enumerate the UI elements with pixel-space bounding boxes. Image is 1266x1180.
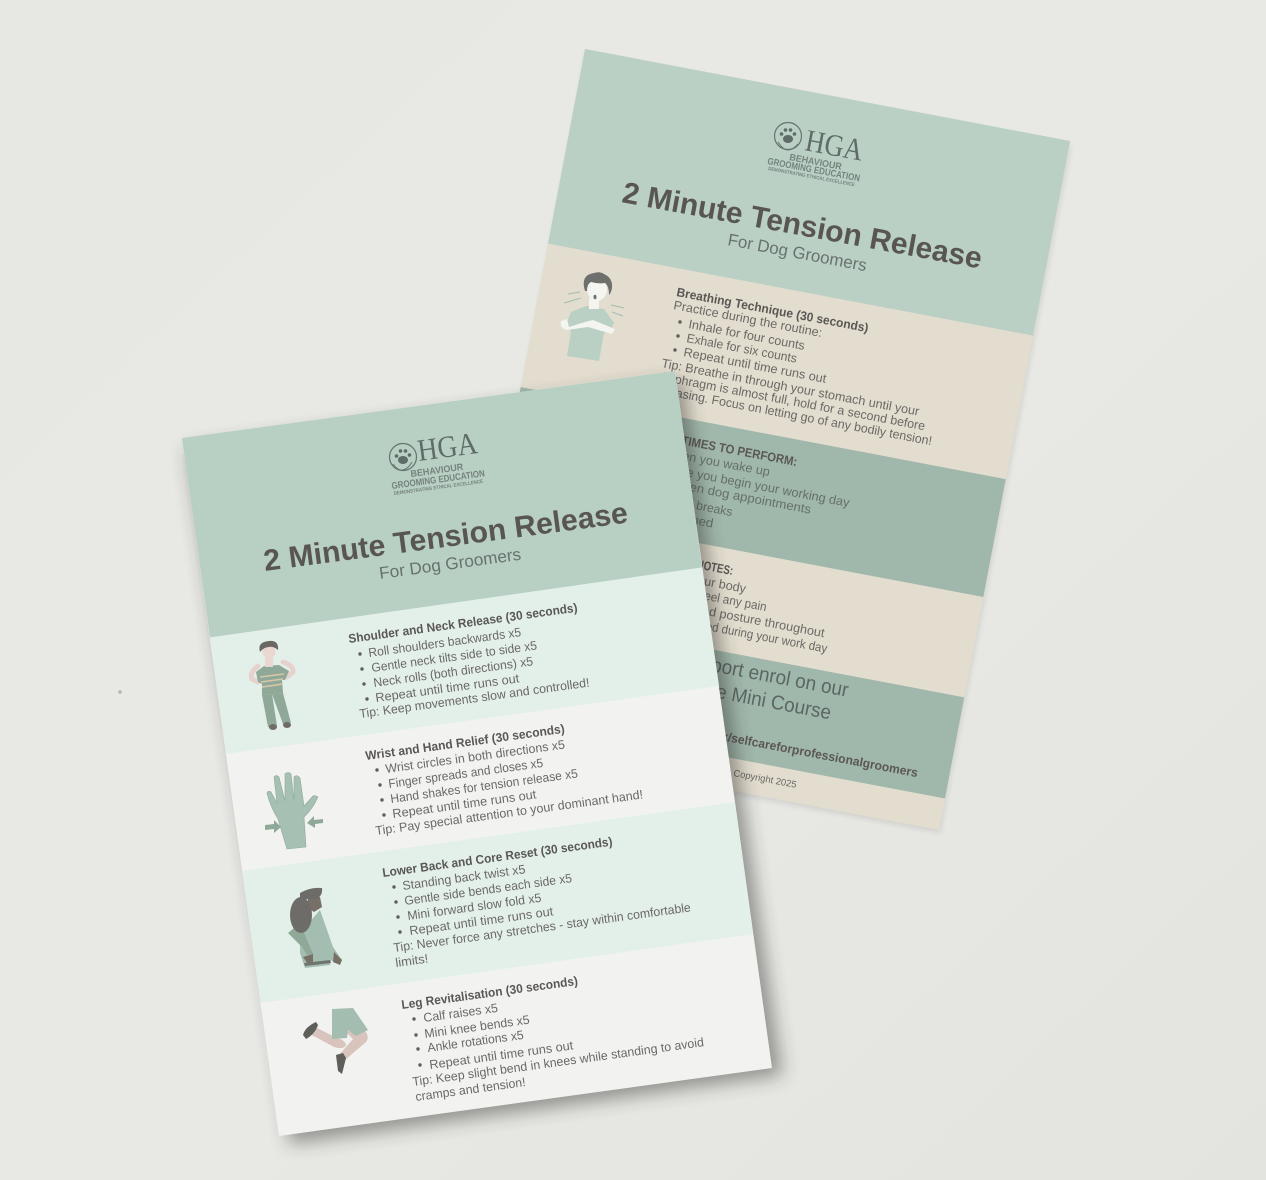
subtitle (back): For Dog Groomers	[726, 230, 868, 275]
text block: important notes: IMPORTANT NOTES:	[636, 546, 734, 578]
text block: best times to perform: BEST TIMES TO PERFORM:	[647, 427, 798, 469]
text block: breathing technique: Breathing Technique (30 seconds)	[675, 285, 870, 335]
text block: wrist and hand relief: Wrist and Hand Relief (30 seconds)	[365, 722, 566, 763]
icon: HGA logo (back): HGA	[803, 122, 867, 168]
text block: leg revitalisation: Ankle rotations x5	[427, 1028, 525, 1055]
text block: wrist and hand relief: Hand shakes for tension release x5	[390, 766, 579, 806]
text block: best times to perform: Between dog appointments	[652, 473, 812, 517]
back card colour bands	[454, 49, 1070, 830]
icon: woman holding lower back	[288, 888, 342, 968]
panel: front card	[182, 371, 772, 1136]
icon: breathing person	[561, 272, 624, 361]
text block: wrist and hand relief: Finger spreads and closes x5	[388, 756, 544, 791]
icon: hand with arrows	[265, 772, 323, 849]
subtitle (front): For Dog Groomers	[378, 545, 522, 583]
text block: leg revitalisation: Tip: Keep slight bend in knees while standing to avoid	[412, 1035, 705, 1089]
text block: leg revitalisation: Mini knee bends x5	[424, 1013, 530, 1041]
text block: best times to perform: Before you begin your working day	[655, 460, 851, 510]
icon: person stretching shoulders	[251, 641, 293, 730]
call to action: hga.uk/selfcareforprofessionalgroomers	[688, 723, 919, 780]
text block: lower back and core reset: Tip: Never force any stretches - stay within comfortable	[393, 900, 692, 955]
text block: shoulder and neck release	[348, 601, 590, 721]
text block: shoulder and neck release: Repeat until time runs out	[375, 671, 521, 705]
text block: lower back and core reset: Gentle side bends each side x5	[404, 871, 573, 908]
icon: HGA logo (front)	[390, 425, 486, 497]
text block: important notes: Stop if you feel any pain	[642, 577, 768, 614]
text block: breathing technique: diaphragm is almost full, hold for a second before	[657, 369, 926, 433]
icon: HGA logo (front): GROOMING EDUCATION	[391, 468, 486, 492]
icon: HGA logo (back): BEHAVIOUR	[788, 152, 843, 173]
text block: shoulder and neck release: Tip: Keep movements slow and controlled!	[359, 676, 590, 721]
text block: best times to perform: When you wake up	[662, 445, 771, 479]
icon: HGA logo (back)	[766, 122, 867, 188]
text block: lower back and core reset: Lower Back and Core Reset (30 seconds)	[382, 835, 613, 880]
text block: best times to perform: During breaks	[656, 491, 734, 519]
text block: lower back and core reset: limits!	[395, 952, 429, 970]
text block: shoulder and neck release: Gentle neck tilts side to side x5	[371, 638, 538, 675]
text block: leg revitalisation: cramps and tension!	[415, 1075, 526, 1104]
call to action	[599, 633, 919, 780]
icon: HGA logo (front): HGA	[415, 425, 480, 468]
icon: HGA logo (back): GROOMING EDUCATION	[766, 156, 861, 184]
text block: lower back and core reset	[382, 835, 692, 970]
text block: breathing technique: Practice during the routine:	[672, 298, 823, 340]
text block: lower back and core reset: Repeat until time runs out	[409, 904, 555, 938]
title (front): 2 Minute Tension Release	[262, 497, 630, 578]
icon: running legs	[303, 1008, 368, 1074]
front card shadow	[188, 380, 782, 1144]
text block: best times to perform: When finished	[629, 501, 715, 531]
copyright: Copyright 2025	[732, 768, 797, 791]
text block: breathing technique: Repeat until time runs out	[682, 345, 828, 386]
call to action: Self Care Mini Course	[647, 668, 833, 724]
icon: HGA logo (back): DEMONSTRATING ETHICAL EXCELLENCE	[768, 166, 856, 188]
text block: wrist and hand relief: Wrist circles in both directions x5	[385, 738, 566, 776]
text block: breathing technique	[654, 285, 933, 448]
text block: wrist and hand relief	[365, 722, 644, 838]
text block: shoulder and neck release: Roll shoulders backwards x5	[368, 625, 522, 660]
text block: leg revitalisation	[401, 974, 705, 1104]
text block: shoulder and neck release: Shoulder and Neck Release (30 seconds)	[348, 601, 578, 646]
icon: HGA logo (front): DEMONSTRATING ETHICAL EXCELLENCE	[393, 479, 484, 497]
text block: wrist and hand relief: Repeat until time runs out	[392, 787, 538, 821]
back card shadow	[456, 54, 1071, 833]
text block: important notes: Maintain good posture throughout	[636, 591, 826, 640]
text block: important notes	[624, 546, 829, 656]
text block: lower back and core reset: Standing back twist x5	[402, 862, 526, 893]
text block: important notes: Listen to your body	[639, 562, 748, 596]
text block: important notes: Repeat as needed during your work day	[624, 604, 829, 656]
text block: leg revitalisation: Repeat until time runs out	[429, 1038, 575, 1072]
text block: breathing technique: Exhale for six counts	[685, 331, 798, 366]
icon: HGA logo (front): BEHAVIOUR	[410, 462, 464, 480]
text block: breathing technique: Inhale for four counts	[687, 317, 806, 353]
panel: back card	[454, 49, 1070, 830]
text block: leg revitalisation: Leg Revitalisation (30 seconds)	[401, 974, 579, 1012]
text block: leg revitalisation: Calf raises x5	[423, 1001, 499, 1025]
text block: shoulder and neck release: Neck rolls (both directions) x5	[373, 654, 534, 690]
text block: breathing technique: Tip: Breathe in through your stomach until your	[660, 356, 920, 419]
text block: best times to perform	[629, 427, 851, 531]
front card colour bands	[182, 371, 772, 1136]
text block: wrist and hand relief: Tip: Pay special attention to your dominant hand!	[375, 787, 644, 838]
title (back): 2 Minute Tension Release	[620, 176, 985, 275]
call to action: For more support enrol on our	[599, 633, 851, 702]
text block: lower back and core reset: Mini forward slow fold x5	[407, 891, 542, 923]
text block: breathing technique: releasing. Focus on letting go of any bodily tension!	[654, 382, 933, 448]
